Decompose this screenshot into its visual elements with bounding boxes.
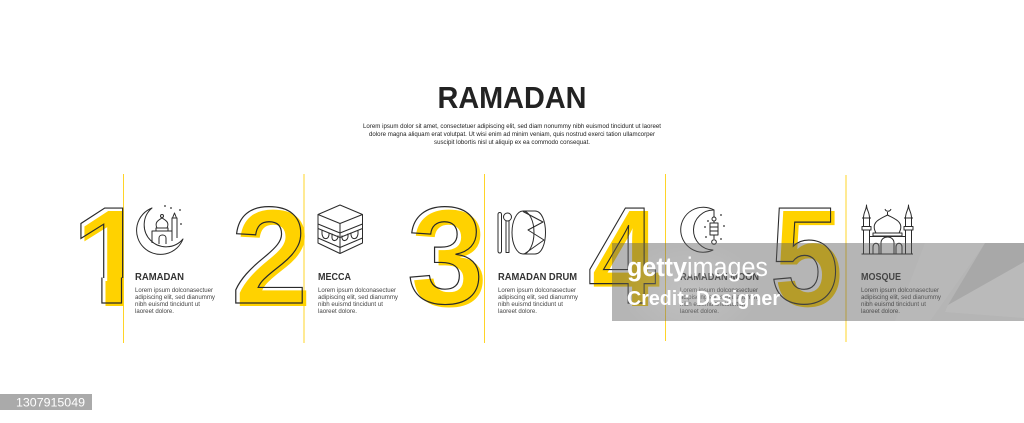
description: [861, 287, 942, 315]
description: Lorem ipsum dolconasectuer: [318, 287, 397, 294]
number 5: 5: [774, 182, 843, 336]
number 1: 1: [75, 182, 152, 336]
intro paragraph: dolore magna aliquam erat volutpat. Ut wisi enim ad minim veniam, quis nostrud exerci tation ullamcorper: [369, 131, 656, 138]
label: Ramadan moon: RAMADAN MOON: [680, 271, 759, 283]
description: laoreet dolore.: [861, 308, 900, 315]
description: adipiscing elit, sed dianummy: [861, 294, 942, 301]
image id tag: [0, 394, 92, 410]
number 3: 3: [411, 182, 488, 336]
description: adipiscing elit, sed dianummy: [135, 294, 216, 301]
icon: crescent and lantern: [681, 207, 724, 252]
image id tag: 1307915049: [16, 398, 85, 410]
watermark logo: gettyimages: [627, 252, 768, 282]
intro paragraph: suscipit lobortis nisl ut aliquip ex ea commodo consequat.: [434, 139, 590, 146]
description: [680, 287, 761, 315]
description: nibh euismd tincidunt ut: [135, 301, 200, 308]
panel: step 5: [770, 179, 942, 336]
description: adipiscing elit, sed dianummy: [318, 294, 399, 301]
number 1: 1: [72, 179, 148, 333]
description: nibh euismd tincidunt ut: [498, 301, 563, 308]
number 1: [80, 208, 124, 306]
watermark band: [612, 240, 1024, 340]
description: Lorem ipsum dolconasectuer: [861, 287, 940, 294]
description: laoreet dolore.: [318, 308, 357, 315]
intro paragraph: Lorem ipsum dolor sit amet, consectetuer adipiscing elit, sed diam nonummy nibh euismod tincidunt ut laoreet: [363, 123, 661, 130]
description: [498, 287, 579, 315]
description: Lorem ipsum dolconasectuer: [135, 287, 214, 294]
label: Mosque: MOSQUE: [861, 271, 901, 283]
watermark credit: Credit: Designer: [627, 288, 780, 310]
label: Mecca: MECCA: [318, 271, 351, 283]
panel: step 3: [407, 179, 579, 336]
number 2: 2: [235, 182, 312, 336]
icon: drum and sticks: [498, 211, 546, 254]
icon: crescent and mosque: [137, 206, 183, 254]
panel: step 4: [588, 179, 761, 336]
description: nibh euismd tincidunt ut: [861, 301, 926, 308]
description: [135, 287, 216, 315]
description: adipiscing elit, sed dianummy: [498, 294, 579, 301]
title: RAMADAN: [438, 80, 586, 115]
description: nibh euismd tincidunt ut: [318, 301, 383, 308]
panel: step 2: [231, 179, 399, 336]
icon: Kaaba: [318, 205, 362, 254]
number 3: 3: [407, 179, 484, 333]
icon: mosque: [862, 205, 913, 254]
description: nibh euismd tincidunt ut: [680, 301, 745, 308]
label: Ramadan drum: RAMADAN DRUM: [498, 271, 577, 283]
number 2: 2: [231, 179, 308, 333]
label: Ramadan: RAMADAN: [135, 271, 184, 283]
number 5: 5: [770, 179, 839, 333]
description: adipiscing elit, sed dianummy: [680, 294, 761, 301]
description: laoreet dolore.: [135, 308, 174, 315]
number 4: 4: [592, 182, 660, 336]
number 4: 4: [588, 179, 656, 333]
description: laoreet dolore.: [680, 308, 719, 315]
intro paragraph: [363, 123, 661, 146]
description: Lorem ipsum dolconasectuer: [680, 287, 759, 294]
description: [318, 287, 399, 315]
description: Lorem ipsum dolconasectuer: [498, 287, 577, 294]
panel: step 1: [80, 205, 215, 313]
description: laoreet dolore.: [498, 308, 537, 315]
